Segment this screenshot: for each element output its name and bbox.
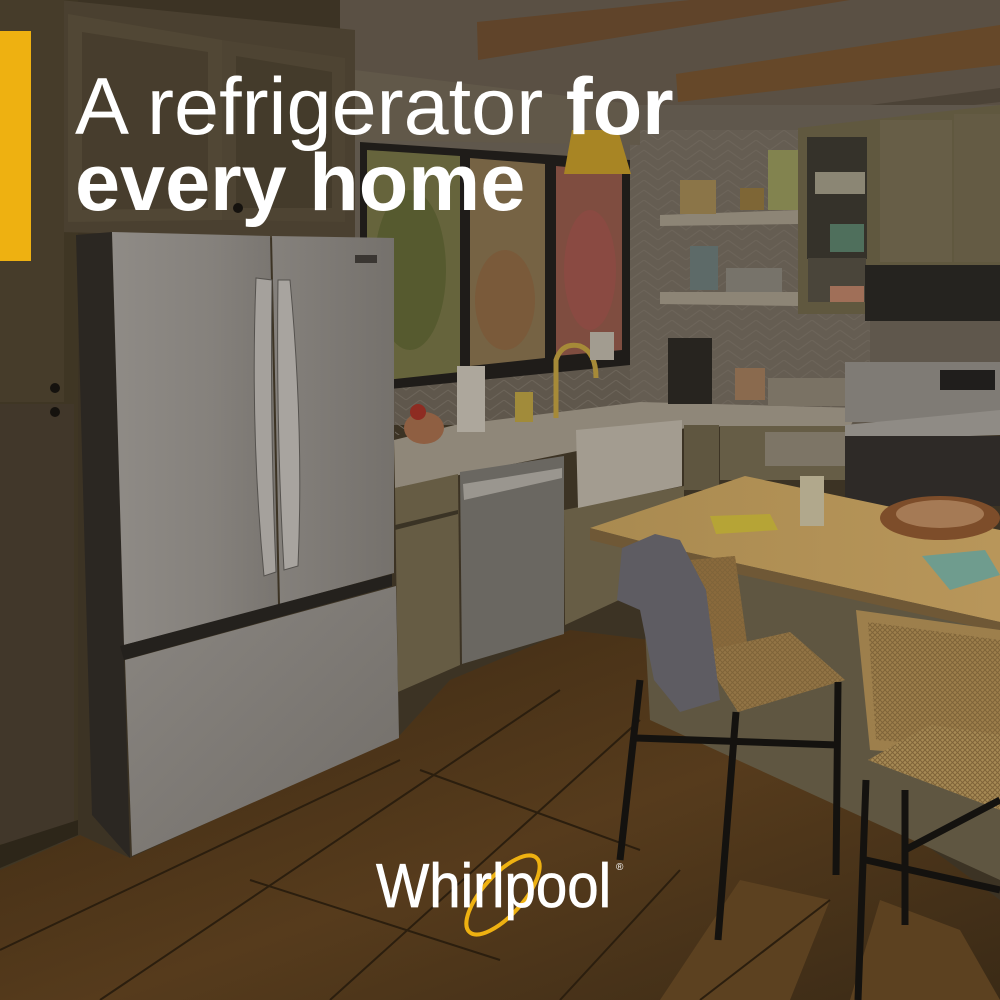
title: A refrigerator for: [75, 62, 674, 152]
left tall cabinets: [0, 0, 355, 870]
accent bar: [0, 31, 31, 261]
title: [75, 62, 674, 228]
towel on stool: [617, 534, 720, 712]
Whirlpool logo: Whirlpool: [376, 852, 611, 921]
upper right cabinets: [798, 105, 1000, 321]
range: [845, 362, 1000, 506]
table top: [590, 476, 1000, 632]
stool one: [620, 556, 845, 940]
island base: [640, 540, 1000, 880]
ceiling beams: [477, 0, 1000, 135]
counter and appliances: [394, 332, 860, 488]
back wall and backsplash: [355, 70, 1000, 435]
shelves and decor: [660, 150, 798, 306]
sunlit floor patches: [660, 880, 1000, 1000]
stool two: [856, 610, 1000, 1000]
ceiling: [340, 0, 1000, 140]
floor: [0, 630, 1000, 1000]
window: [360, 142, 630, 392]
Whirlpool logo: ®: [616, 862, 623, 873]
floor planks: [0, 690, 830, 1000]
pendant lamp: [564, 130, 631, 174]
title: every home: [75, 138, 525, 228]
fridge: [76, 232, 399, 858]
base cabinets: [395, 420, 845, 692]
